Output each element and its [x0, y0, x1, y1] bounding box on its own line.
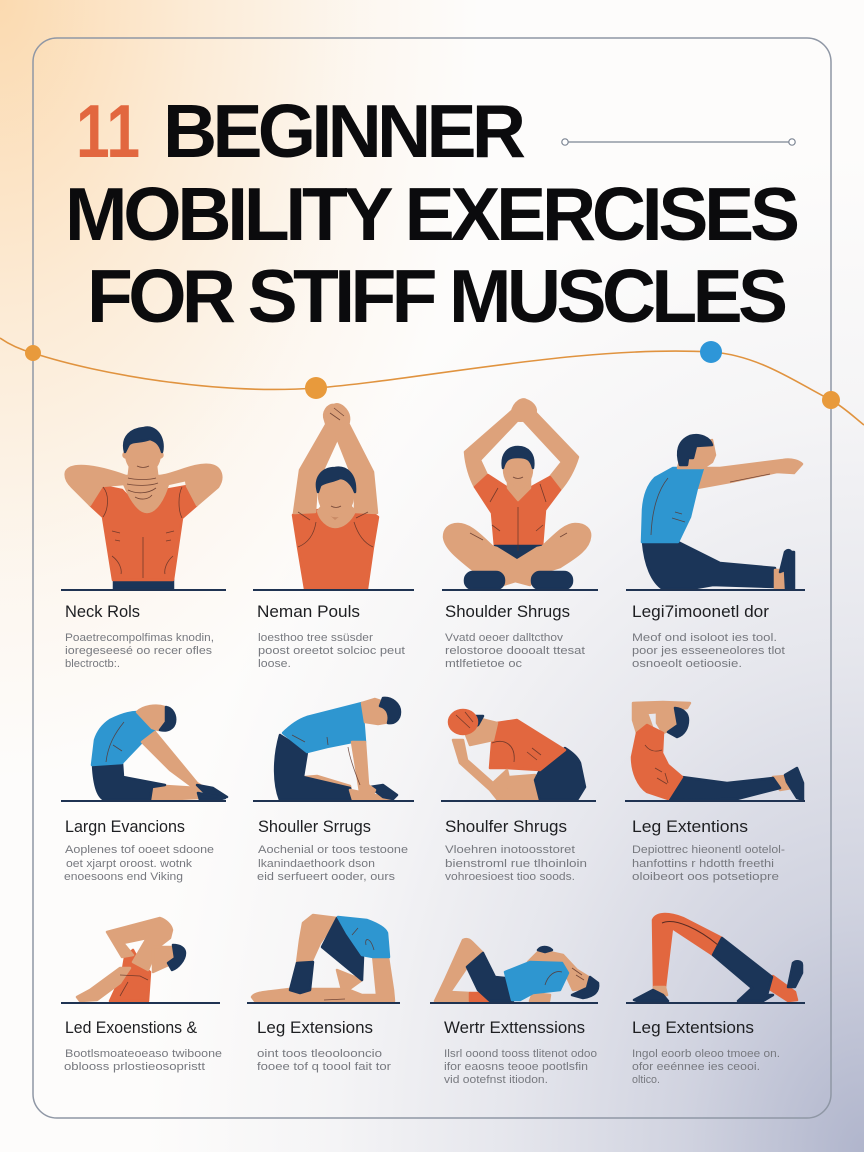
description: oblooss prlostieosopristt	[64, 1061, 206, 1073]
exercise name: Led Exoenstions &	[65, 1019, 197, 1037]
ground line	[253, 589, 414, 591]
description: poor jes esseeneolores tlot	[632, 645, 786, 657]
description	[632, 844, 785, 883]
panel: exercise 6	[253, 698, 414, 883]
description: ifor eaosns teooe pootlsfin	[444, 1061, 588, 1073]
panel: exercise 8	[625, 702, 805, 883]
description: Vvatd oeoer dalltcthov	[445, 632, 563, 644]
panel: exercise 11	[430, 939, 598, 1086]
figure: side lying stretch	[77, 918, 185, 1001]
description	[64, 844, 214, 883]
ground line	[625, 800, 805, 802]
description: Bootlsmoateoeaso twiboone	[65, 1048, 222, 1060]
figure: cross-legged seated reach	[444, 400, 590, 589]
description: poost oreetot solcioc peut	[258, 645, 406, 657]
description: lkanindaethoork dson	[258, 858, 375, 870]
figure: overhead reach	[293, 404, 378, 589]
description: Meof ond isoloot ies tool.	[632, 632, 777, 644]
ground line	[626, 1002, 805, 1004]
description	[64, 1048, 222, 1073]
title: FOR STIFF MUSCLES	[87, 254, 788, 338]
figure: kneeling forward fold	[275, 698, 400, 800]
description: oint toos tleoolooncio	[257, 1048, 382, 1060]
panel: exercise 4	[626, 435, 805, 670]
description: enoesoons end Viking	[64, 871, 183, 883]
ground line	[61, 800, 226, 802]
description: vohroesioest tioo soods.	[445, 871, 575, 883]
panel: exercise 2	[253, 404, 414, 670]
figure: hip bridge leg raise	[634, 914, 802, 1001]
description: Ingol eoorb oleoo tmoee on.	[632, 1048, 780, 1060]
description: Aoplenes tof ooeet sdoone	[65, 844, 214, 856]
exercise name: Legi7imoonetl dor	[632, 603, 770, 621]
description	[65, 632, 214, 670]
panel: exercise 10	[247, 915, 400, 1073]
panel: exercise 9	[61, 918, 222, 1073]
description: oet xjarpt oroost. wotnk	[66, 858, 192, 870]
exercise name: Shouller Srrugs	[258, 818, 371, 836]
description: fooee tof q toool fait tor	[257, 1061, 391, 1073]
description	[445, 844, 587, 883]
title: 11	[76, 89, 140, 173]
description: loose.	[258, 658, 291, 670]
ground line	[247, 1002, 400, 1004]
exercise name: Shoulfer Shrugs	[445, 818, 567, 836]
description: loesthoo tree ssüsder	[258, 632, 373, 644]
description: Vloehren inotoosstoret	[445, 844, 576, 856]
description: bienstroml rue tlhoinloin	[445, 858, 587, 870]
exercise name: Wertr Exttenssions	[444, 1019, 585, 1037]
description	[632, 632, 786, 670]
title: MOBILITY EXERCISES	[65, 172, 800, 256]
description: Aochenial or toos testoone	[258, 844, 408, 856]
description: vid ootefnst itiodon.	[444, 1074, 548, 1086]
ground line	[626, 589, 805, 591]
description	[445, 632, 586, 670]
description: blectroctb:.	[65, 658, 120, 670]
description: Depiottrec hieonentl ootelol-	[632, 844, 785, 856]
description	[257, 1048, 391, 1073]
description: oloibeort oos potsetiopre	[632, 871, 779, 883]
figure: seated head down	[449, 710, 585, 800]
description	[258, 632, 406, 670]
description: Poaetrecompolfimas knodin,	[65, 632, 214, 644]
description	[632, 1048, 780, 1086]
exercise name: Leg Extensions	[257, 1019, 373, 1037]
title	[65, 89, 800, 338]
wave timeline with dots	[0, 338, 864, 425]
ground line	[253, 800, 414, 802]
figure: back extension	[632, 702, 803, 800]
figure: neck rolls	[66, 428, 221, 589]
title: BEGINNER	[163, 89, 526, 173]
exercise name: Shoulder Shrugs	[445, 603, 570, 621]
exercise name: Leg Extentsions	[632, 1019, 754, 1037]
description: eid serfueert ooder, ours	[257, 871, 395, 883]
exercise name: Leg Extentions	[632, 818, 748, 836]
description: relostoroe doooalt ttesat	[445, 645, 586, 657]
panel: exercise 3	[442, 400, 598, 670]
description: ioregeseesé oo recer ofles	[65, 645, 212, 657]
description	[444, 1048, 597, 1086]
description	[257, 844, 408, 883]
panel: exercise 5	[61, 706, 227, 883]
ground line	[442, 589, 598, 591]
description: hanfottins r hdotth freethi	[632, 858, 774, 870]
figure: seated toe touch	[92, 706, 227, 800]
exercise name: Largn Evancions	[65, 818, 185, 836]
description: oltico.	[632, 1074, 660, 1086]
header connector line	[562, 139, 795, 145]
description: ofor eeénnee ies ceooi.	[632, 1061, 760, 1073]
ground line	[441, 800, 596, 802]
figure: seated forward reach	[642, 435, 802, 589]
figure: crab bridge	[252, 915, 394, 1001]
description: osnoeolt oetioosie.	[632, 658, 742, 670]
description: Ilsrl ooond tooss tlitenot odoo	[444, 1048, 597, 1060]
ground line	[61, 589, 226, 591]
figure: lying knee bent	[435, 939, 598, 1001]
description: mtlfetietoe oc	[445, 658, 522, 670]
panel: exercise 12	[626, 914, 805, 1086]
ground line	[430, 1002, 598, 1004]
panel: exercise 7	[441, 710, 596, 883]
exercise name: Neck Rols	[65, 603, 140, 621]
ground line	[61, 1002, 220, 1004]
panel: exercise 1	[61, 428, 226, 670]
exercise name: Neman Pouls	[257, 603, 360, 621]
